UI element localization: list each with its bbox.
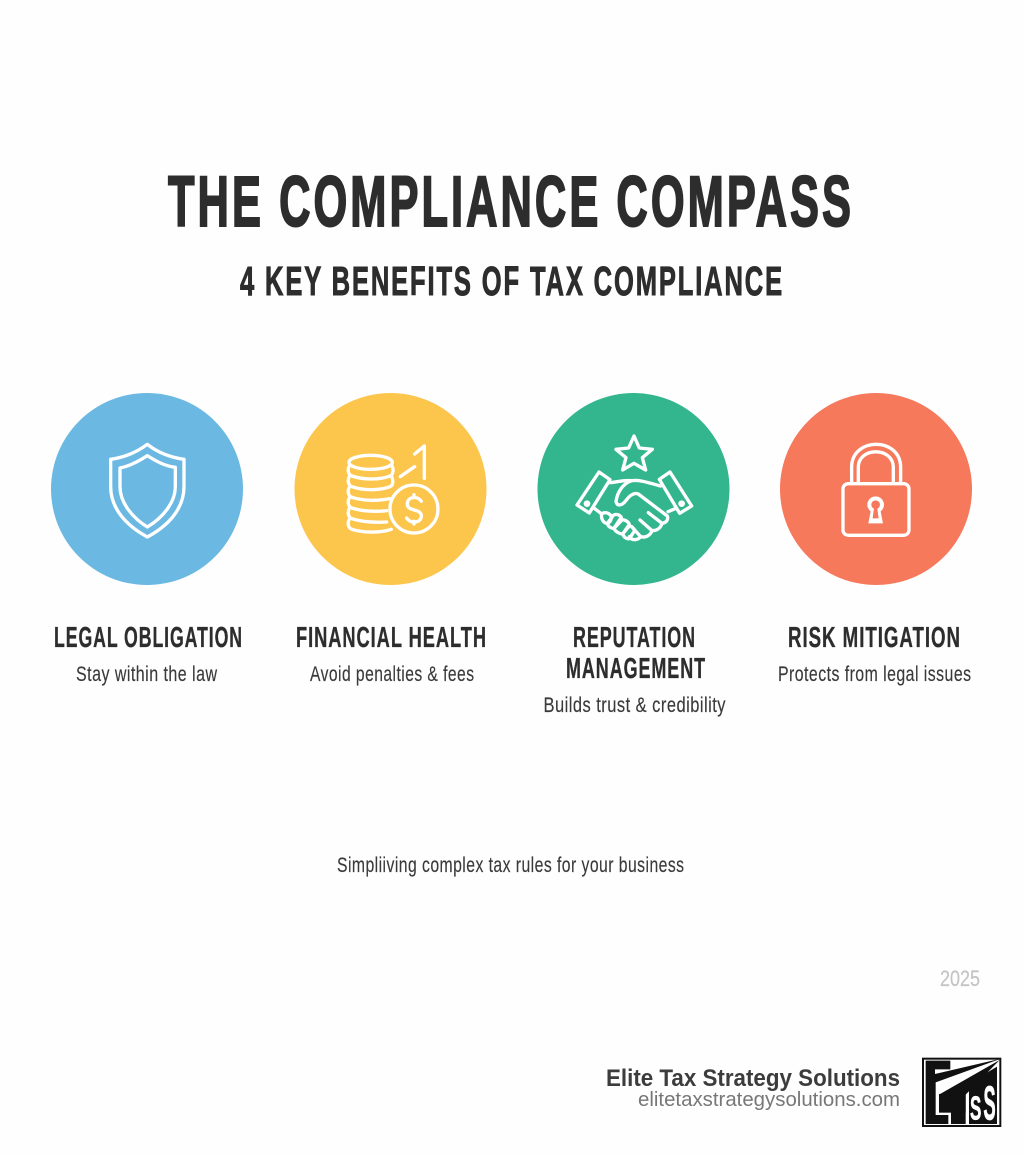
- heading: legal obligation: LEGAL OBLIGATION: [54, 622, 243, 654]
- description: financial health: Avoid penalties & fees: [310, 663, 474, 686]
- year: 2025: [940, 966, 980, 991]
- description: reputation management: Builds trust & credibility: [544, 694, 726, 717]
- coral circle: [780, 393, 972, 585]
- heading: reputation management: REPUTATION: [573, 622, 696, 654]
- description: legal obligation: Stay within the law: [76, 663, 218, 686]
- company name: Elite Tax Strategy Solutions: [606, 1065, 900, 1092]
- panel: financial health: [294, 393, 487, 686]
- icon: shield: [111, 444, 184, 537]
- panel: legal obligation: [51, 393, 243, 686]
- heading: reputation management: MANAGEMENT: [566, 653, 706, 685]
- website: elitetaxstrategysolutions.com: [638, 1089, 900, 1111]
- panel: risk mitigation: [778, 393, 972, 686]
- panel: reputation management: [538, 393, 730, 717]
- logo: ETSS: S: [983, 1076, 996, 1130]
- tagline: Simpliiving complex tax rules for your business: [337, 854, 684, 877]
- heading: reputation management: [566, 622, 706, 685]
- icon: padlock: [843, 444, 909, 535]
- heading: financial health: FINANCIAL HEALTH: [296, 622, 487, 654]
- yellow circle: [294, 393, 486, 585]
- logo: ETSS: S: [970, 1090, 981, 1127]
- footer brand text: [606, 1065, 900, 1111]
- icon: coins with dollar and arrow: [348, 446, 438, 533]
- logo: ETSS: [923, 1059, 1001, 1130]
- icon: handshake and star: [577, 436, 692, 540]
- blue circle: [51, 393, 243, 585]
- green circle: [538, 393, 730, 585]
